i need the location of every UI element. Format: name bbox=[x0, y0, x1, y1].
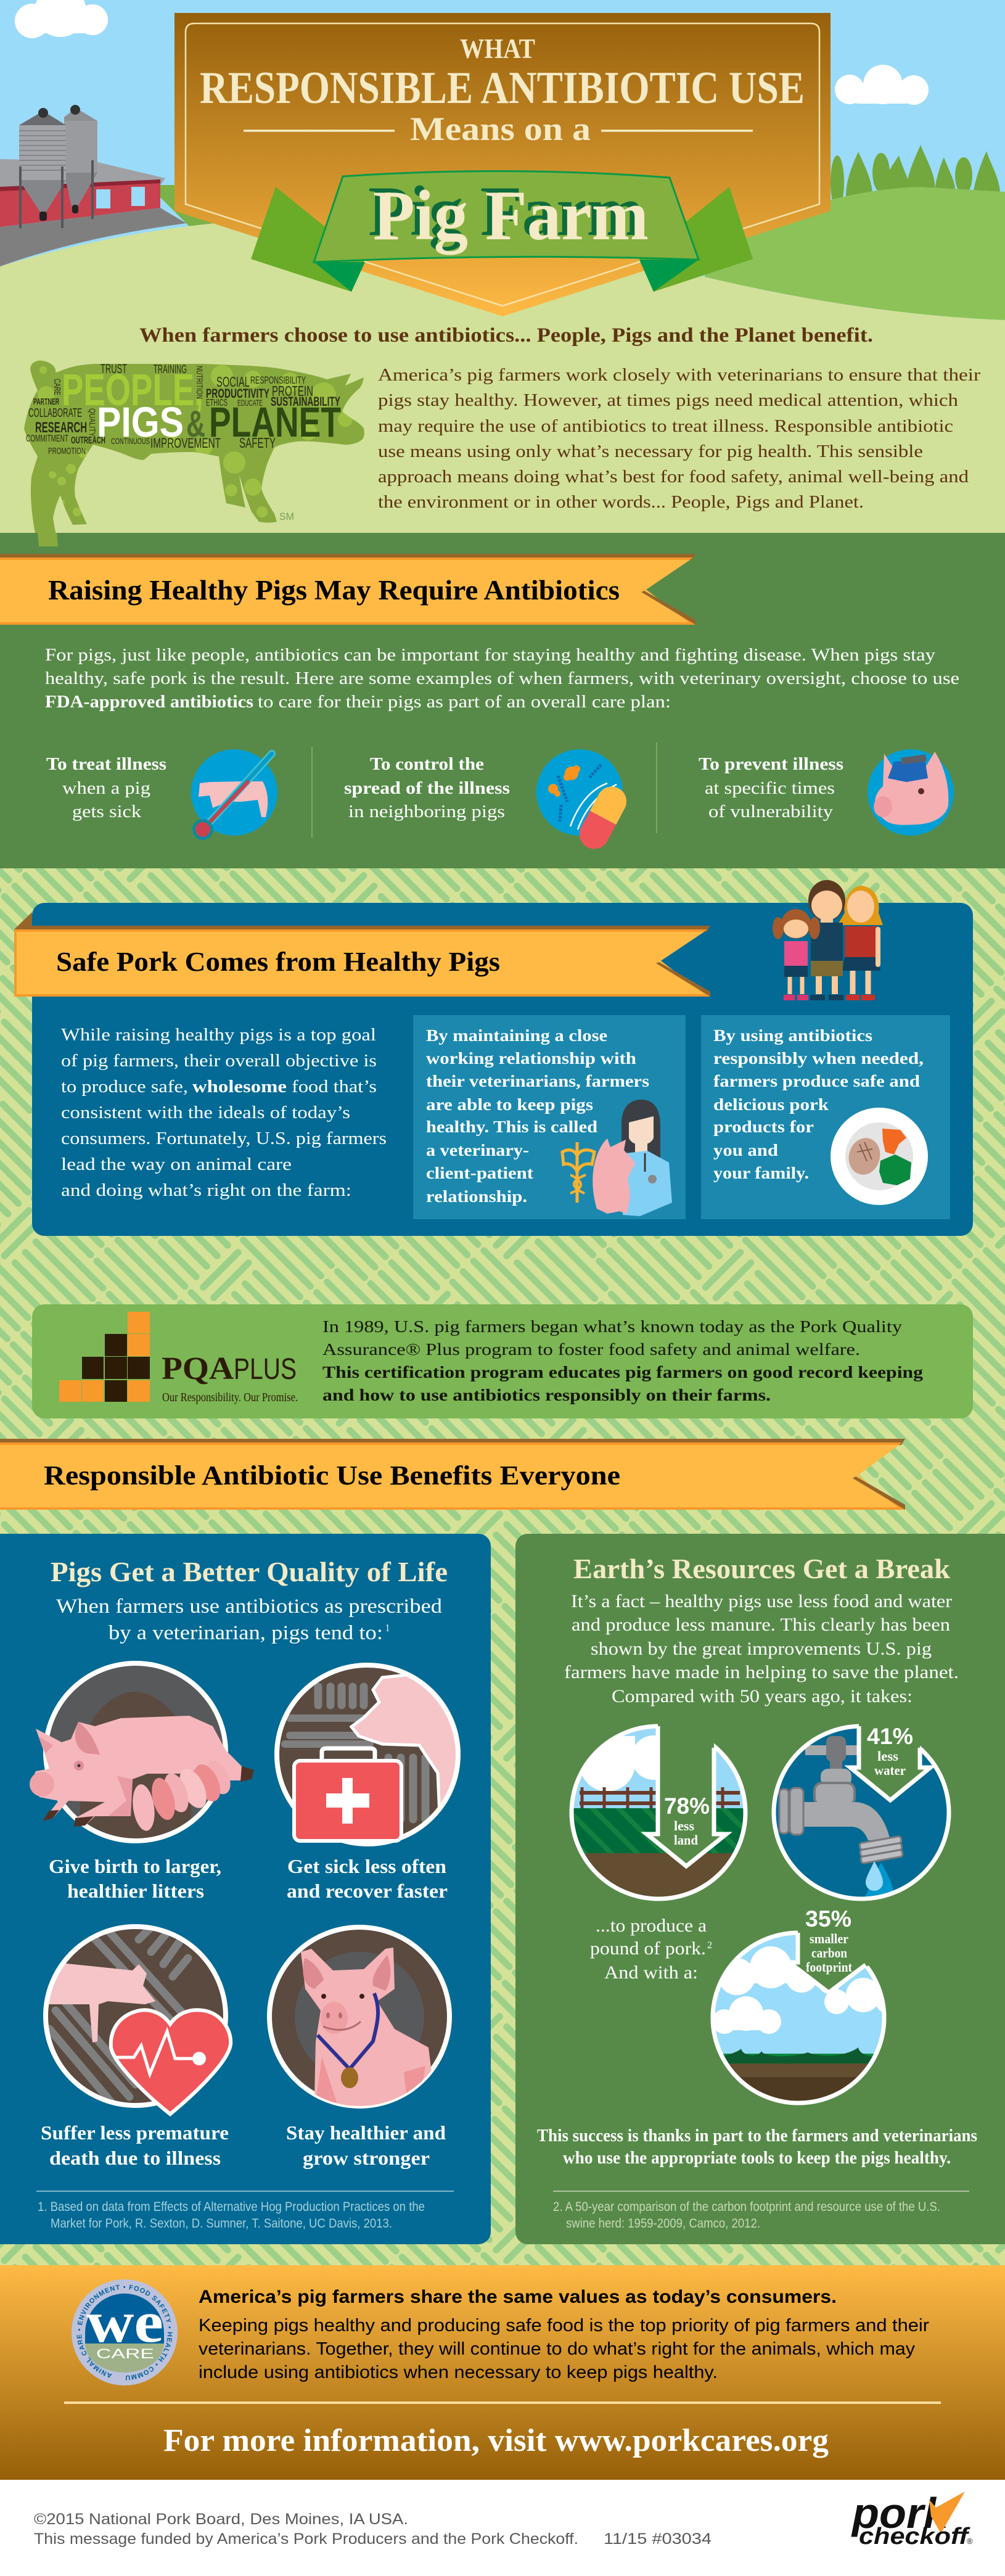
text: to produce a pound of pork: ...to produce a bbox=[596, 1916, 707, 1936]
text: to produce a pound of pork: pound of pork. bbox=[590, 1938, 706, 1959]
pig word cloud bbox=[24, 361, 364, 546]
pqa text: This certification program educates pig farmers on good record keeping bbox=[322, 1363, 924, 1381]
pig words: IMPROVEMENT bbox=[150, 435, 221, 451]
caption: healthier: Stay healthier and bbox=[286, 2121, 446, 2144]
pqa text: Assurance® Plus program to foster food safety and animal welfare. bbox=[322, 1340, 860, 1359]
intro text: and produce less manure. This clearly has been bbox=[572, 1615, 950, 1635]
logo: we care: ANIMAL CARE • ENVIRONMENT • FOOD SAFETY • HEALTH • COMMUNITY bbox=[76, 2284, 173, 2381]
footnote 2 bbox=[553, 2191, 969, 2231]
intro paragraph: America’s pig farmers work closely with veterinarians to ensure that their bbox=[378, 366, 981, 385]
left text: of pig farmers, their overall objective is bbox=[61, 1051, 377, 1071]
pig words: NUTRITION bbox=[195, 366, 205, 399]
box: responsible use bbox=[701, 1015, 950, 1219]
icon: pig with ice pack bbox=[868, 749, 954, 836]
caption: less premature death bbox=[41, 2121, 229, 2169]
text: to produce a pound of pork bbox=[590, 1916, 712, 1983]
logo: pork checkoff: pork bbox=[851, 2489, 950, 2537]
label: 35%: carbon bbox=[811, 1945, 847, 1961]
trees bbox=[831, 145, 1000, 208]
caption: larger litters: healthier litters bbox=[67, 1880, 204, 1902]
box: responsible use: delicious pork bbox=[713, 1095, 829, 1114]
banner: safe pork bbox=[14, 912, 710, 997]
pig words: PRODUCTIVITY bbox=[206, 387, 269, 401]
intro text bbox=[45, 646, 959, 712]
intro paragraph: approach means doing what’s best for food safety, animal well-being and bbox=[378, 467, 969, 487]
pig words bbox=[26, 362, 341, 522]
decorative chevron pattern bbox=[0, 868, 1005, 2265]
pig words: CARE bbox=[52, 379, 62, 395]
intro text: It’s a fact – healthy pigs use less food and water bbox=[571, 1591, 952, 1611]
item: to prevent illness bbox=[699, 754, 843, 821]
label: 41%: water bbox=[874, 1763, 906, 1778]
item: to treat illness: gets sick bbox=[72, 802, 142, 821]
icon: thermometer bbox=[191, 749, 277, 840]
call to action: For more information, visit www.porkcares.org bbox=[163, 2423, 829, 2458]
intro paragraph: pigs stay healthy. However, at times pigs need medical attention, which bbox=[378, 391, 958, 410]
divider bbox=[311, 747, 313, 838]
sky background bbox=[0, 0, 1005, 321]
box: veterinary relationship: relationship. bbox=[426, 1187, 527, 1206]
foreground hill bbox=[0, 221, 1005, 537]
left text: consumers. Fortunately, U.S. pig farmers bbox=[61, 1129, 387, 1148]
copyright text: This message funded by America’s Pork Producers and the Pork Checkoff. bbox=[34, 2530, 578, 2548]
box: veterinary relationship: a veterinary- bbox=[426, 1141, 529, 1159]
footer bbox=[0, 2480, 1005, 2576]
panel: pigs get a better quality of life bbox=[0, 1534, 491, 2244]
box: veterinary relationship: working relationship with bbox=[426, 1049, 636, 1068]
item: to control the spread: in neighboring pigs bbox=[348, 802, 505, 821]
divider bbox=[656, 743, 657, 833]
box: responsible use: farmers produce safe and bbox=[713, 1072, 920, 1090]
footnote 1: Market for Pork, R. Sexton, D. Sumner, T. Saitone, UC Davis, 2013. bbox=[51, 2216, 392, 2231]
back hill bbox=[148, 185, 259, 259]
intro paragraph bbox=[378, 366, 981, 512]
footnote 2: 2. A 50-year comparison of the carbon footprint and resource use of the U.S. bbox=[553, 2200, 940, 2214]
heading: Pigs Get a Better Quality of Life bbox=[51, 1557, 448, 1587]
pig words: TRUST bbox=[100, 362, 127, 376]
box: veterinary relationship: are able to keep pigs bbox=[426, 1095, 593, 1114]
pig words: SOCIAL bbox=[216, 374, 250, 390]
subheading: When farmers choose to use antibiotics... People, Pigs and the Planet benefit. bbox=[139, 324, 873, 347]
pig words: EDUCATE bbox=[237, 398, 263, 408]
logo: pqa plus: PQA bbox=[162, 1351, 234, 1386]
label: 41% bbox=[867, 1724, 913, 1778]
ribbon text: Pig Farm bbox=[373, 176, 649, 255]
panel: raising healthy pigs bbox=[0, 533, 1005, 868]
box: responsible use: products for bbox=[713, 1117, 814, 1136]
label: 35%: 35% bbox=[805, 1906, 851, 1932]
right hill bbox=[705, 187, 1005, 320]
caption: larger litters bbox=[49, 1855, 221, 1902]
ribbon: pig farm bbox=[251, 171, 753, 292]
cloud right bbox=[835, 65, 929, 105]
logo: pqa plus: PLUS bbox=[234, 1353, 297, 1386]
barn bbox=[0, 159, 165, 227]
logo: we care bbox=[72, 2279, 178, 2385]
intro text bbox=[56, 1595, 443, 1644]
logo: pork checkoff: ® bbox=[967, 2537, 973, 2546]
intro text bbox=[564, 1591, 959, 1706]
text: to produce a pound of pork: 2 bbox=[707, 1940, 712, 1951]
copyright text bbox=[34, 2511, 712, 2548]
pig words: SAFETY bbox=[239, 435, 276, 451]
label: 35% bbox=[805, 1906, 853, 1975]
footnote 2: swine herd: 1959-2009, Camco, 2012. bbox=[566, 2216, 760, 2231]
intro text: healthy, safe pork is the result. Here are some examples of when farmers, with veterinary oversight, choose to use bbox=[45, 669, 959, 688]
pig words: PROTEIN bbox=[272, 383, 313, 399]
text: this success: who use the appropriate tools to keep the pigs healthy. bbox=[563, 2149, 951, 2168]
caption: healthier bbox=[286, 2121, 446, 2169]
icon: plate of food bbox=[831, 1108, 928, 1205]
box: responsible use: you and bbox=[713, 1141, 778, 1159]
box: veterinary relationship: client-patient bbox=[426, 1164, 533, 1182]
caption: larger litters: Give birth to larger, bbox=[49, 1855, 221, 1877]
item: to prevent illness: of vulnerability bbox=[708, 802, 834, 821]
label: 78%: land bbox=[674, 1832, 698, 1848]
intro text: farmers have made in helping to save the planet. bbox=[564, 1662, 959, 1682]
pig words: SM bbox=[279, 511, 294, 522]
title banner bbox=[174, 13, 831, 316]
pig words: CONTINUOUS bbox=[111, 436, 150, 446]
banner: safe pork: Safe Pork Comes from Healthy Pigs bbox=[56, 947, 500, 977]
left text: food that’s bbox=[292, 1077, 377, 1097]
item: to prevent illness: To prevent illness bbox=[699, 754, 843, 774]
item: to treat illness: when a pig bbox=[62, 778, 150, 798]
left text: While raising healthy pigs is a top goal bbox=[61, 1025, 376, 1045]
pig words: QUALITY bbox=[88, 408, 97, 437]
label: 41%: 41% bbox=[867, 1724, 913, 1749]
panel: safe pork bbox=[14, 880, 973, 1236]
left text: and doing what’s right on the farm: bbox=[61, 1180, 351, 1200]
text: shared values: include using antibiotics when necessary to keep pigs healthy. bbox=[199, 2363, 718, 2382]
label: 78% bbox=[664, 1793, 710, 1848]
logo: we care: CARE bbox=[96, 2346, 154, 2361]
box: veterinary relationship bbox=[413, 1015, 686, 1219]
text: shared values bbox=[199, 2287, 929, 2382]
box: responsible use: your family. bbox=[713, 1164, 809, 1182]
pig words: COLLABORATE bbox=[28, 406, 82, 420]
chart: 35% smaller carbon footprint bbox=[710, 1911, 887, 2105]
label: 35%: footprint bbox=[806, 1959, 853, 1975]
pig words: ETHICS bbox=[206, 398, 228, 408]
pig words: PARTNER bbox=[33, 397, 59, 407]
copyright text: 11/15 #03034 bbox=[604, 2530, 712, 2548]
icon: veterinarian with pig bbox=[562, 1100, 672, 1216]
pig words: OUTREACH bbox=[71, 435, 105, 446]
text: to produce a pound of pork: And with a: bbox=[604, 1962, 698, 1983]
text: this success bbox=[537, 2126, 977, 2168]
item: to control the spread: To control the bbox=[370, 754, 484, 774]
intro text: 1 bbox=[385, 1622, 390, 1634]
panel: pqa plus bbox=[32, 1304, 973, 1418]
banner: raising healthy pigs bbox=[0, 554, 695, 625]
box: responsible use: responsibly when needed, bbox=[713, 1049, 924, 1068]
text: shared values: veterinarians. Together, they will continue to do what’s right for the animals, which may bbox=[199, 2339, 916, 2359]
text: this success: This success is thanks in part to the farmers and veterinarians bbox=[537, 2126, 977, 2146]
pig words: RESPONSIBILITY bbox=[250, 374, 306, 386]
illustration: sow with piglets bbox=[30, 1663, 254, 1841]
pig words: PIGS bbox=[97, 398, 184, 446]
intro paragraph: may require the use of antibiotics to treat illness. Responsible antibiotic bbox=[378, 417, 953, 436]
caption: less sick: Get sick less often bbox=[287, 1855, 446, 1877]
label: 78%: 78% bbox=[664, 1793, 710, 1819]
piglets bbox=[130, 1757, 236, 1832]
copyright text: ©2015 National Pork Board, Des Moines, IA USA. bbox=[34, 2511, 408, 2528]
panel: earth's resources bbox=[515, 1534, 1005, 2244]
logo: we care: we bbox=[86, 2289, 163, 2355]
pig words: COMMITMENT bbox=[26, 434, 68, 444]
title: means on a: Means on a bbox=[410, 110, 591, 147]
heading: Earth’s Resources Get a Break bbox=[573, 1553, 950, 1584]
gravel road bbox=[0, 208, 186, 266]
caption: healthier: grow stronger bbox=[303, 2147, 430, 2169]
intro text: to care for their pigs as part of an overall care plan: bbox=[258, 693, 671, 712]
text: shared values: America’s pig farmers share the same values as today’s consumers. bbox=[199, 2287, 837, 2307]
footnote 1: 1. Based on data from Effects of Alternative Hog Production Practices on the bbox=[38, 2200, 425, 2214]
label: 78%: less bbox=[674, 1818, 694, 1833]
ribbon text: Pig Farm bbox=[368, 172, 644, 251]
illustration: pig with medal bbox=[269, 1927, 449, 2106]
text: shared values: Keeping pigs healthy and producing safe food is the top priority of pig farmers and their bbox=[199, 2316, 929, 2335]
item: to prevent illness: at specific times bbox=[705, 778, 835, 798]
pqa text: and how to use antibiotics responsibly on their farms. bbox=[322, 1386, 771, 1404]
logo: pqa plus bbox=[59, 1312, 298, 1404]
illustration: pig and heart bbox=[43, 1927, 231, 2114]
icon: bacteria and pill bbox=[536, 749, 632, 854]
caption: less sick bbox=[287, 1855, 448, 1902]
pqa text: In 1989, U.S. pig farmers began what’s known today as the Pork Quality bbox=[322, 1317, 903, 1336]
caption: less premature death: death due to illness bbox=[49, 2147, 221, 2169]
title: responsible antibiotic use: RESPONSIBLE ANTIBIOTIC USE bbox=[200, 63, 805, 113]
title: what: WHAT bbox=[460, 33, 535, 64]
box: responsible use: By using antibiotics bbox=[713, 1026, 872, 1045]
chart: 41% less water bbox=[774, 1719, 949, 1901]
banner: raising healthy pigs: Raising Healthy Pigs May Require Antibiotics bbox=[48, 575, 620, 606]
intro text: For pigs, just like people, antibiotics can be important for staying healthy and fighting disease. When pigs stay bbox=[45, 646, 935, 665]
box: veterinary relationship: By maintaining a close bbox=[426, 1026, 607, 1045]
icon: family bbox=[773, 880, 883, 1000]
footnote 1 bbox=[36, 2191, 454, 2231]
intro text: Compared with 50 years ago, it takes: bbox=[612, 1686, 913, 1706]
cloud top left bbox=[15, 0, 108, 38]
item: to treat illness: To treat illness bbox=[46, 754, 166, 774]
item: to control the spread bbox=[344, 754, 510, 821]
intro paragraph: the environment or in other words... People, Pigs and Planet. bbox=[378, 493, 864, 512]
illustration: pig and first-aid kit bbox=[277, 1665, 469, 1844]
intro text: by a veterinarian, pigs tend to: bbox=[109, 1622, 383, 1644]
item: to control the spread: spread of the illness bbox=[344, 778, 510, 798]
banner: benefits everyone: Responsible Antibiotic Use Benefits Everyone bbox=[44, 1460, 620, 1491]
pig words: PLANET bbox=[209, 398, 341, 446]
pig words: PEOPLE, bbox=[62, 366, 203, 415]
left text: wholesome bbox=[192, 1077, 287, 1097]
left text: lead the way on animal care bbox=[61, 1154, 292, 1174]
pig words: PROMOTION bbox=[48, 446, 86, 456]
label: 41%: less bbox=[877, 1748, 898, 1764]
dad bbox=[808, 880, 845, 1000]
label: 35%: smaller bbox=[810, 1931, 848, 1946]
girl bbox=[773, 909, 820, 1000]
intro text: FDA-approved antibiotics bbox=[45, 693, 253, 712]
left text: consistent with the ideals of today’s bbox=[61, 1103, 350, 1122]
banner: benefits everyone bbox=[0, 1439, 905, 1510]
intro text: When farmers use antibiotics as prescribed bbox=[56, 1595, 443, 1618]
pig words: RESEARCH bbox=[35, 419, 87, 436]
intro paragraph: use means using only what’s necessary for pig health. This sensible bbox=[378, 442, 923, 461]
grain silos bbox=[19, 105, 97, 228]
box: veterinary relationship: their veterinarians, farmers bbox=[426, 1072, 649, 1090]
pig words: TRAINING bbox=[154, 363, 187, 376]
logo: pork checkoff bbox=[851, 2489, 973, 2549]
pqa text bbox=[322, 1317, 924, 1404]
logo: pork checkoff: checkoff bbox=[859, 2524, 970, 2549]
pig words: & bbox=[186, 403, 205, 445]
caption: less premature death: Suffer less premature bbox=[41, 2121, 229, 2144]
mom bbox=[837, 886, 883, 1000]
pig words: SUSTAINABILITY bbox=[271, 395, 340, 409]
caption: less sick: and recover faster bbox=[287, 1880, 448, 1902]
left text: to produce safe, bbox=[61, 1077, 188, 1097]
item: to treat illness bbox=[46, 754, 166, 821]
box: veterinary relationship: healthy. This is called bbox=[426, 1117, 597, 1136]
logo: pqa plus: Our Responsibility. Our Promise. bbox=[162, 1391, 298, 1404]
left text bbox=[61, 1025, 387, 1200]
intro text: shown by the great improvements U.S. pig bbox=[591, 1639, 932, 1659]
chart: 78% less land bbox=[567, 1719, 752, 1903]
